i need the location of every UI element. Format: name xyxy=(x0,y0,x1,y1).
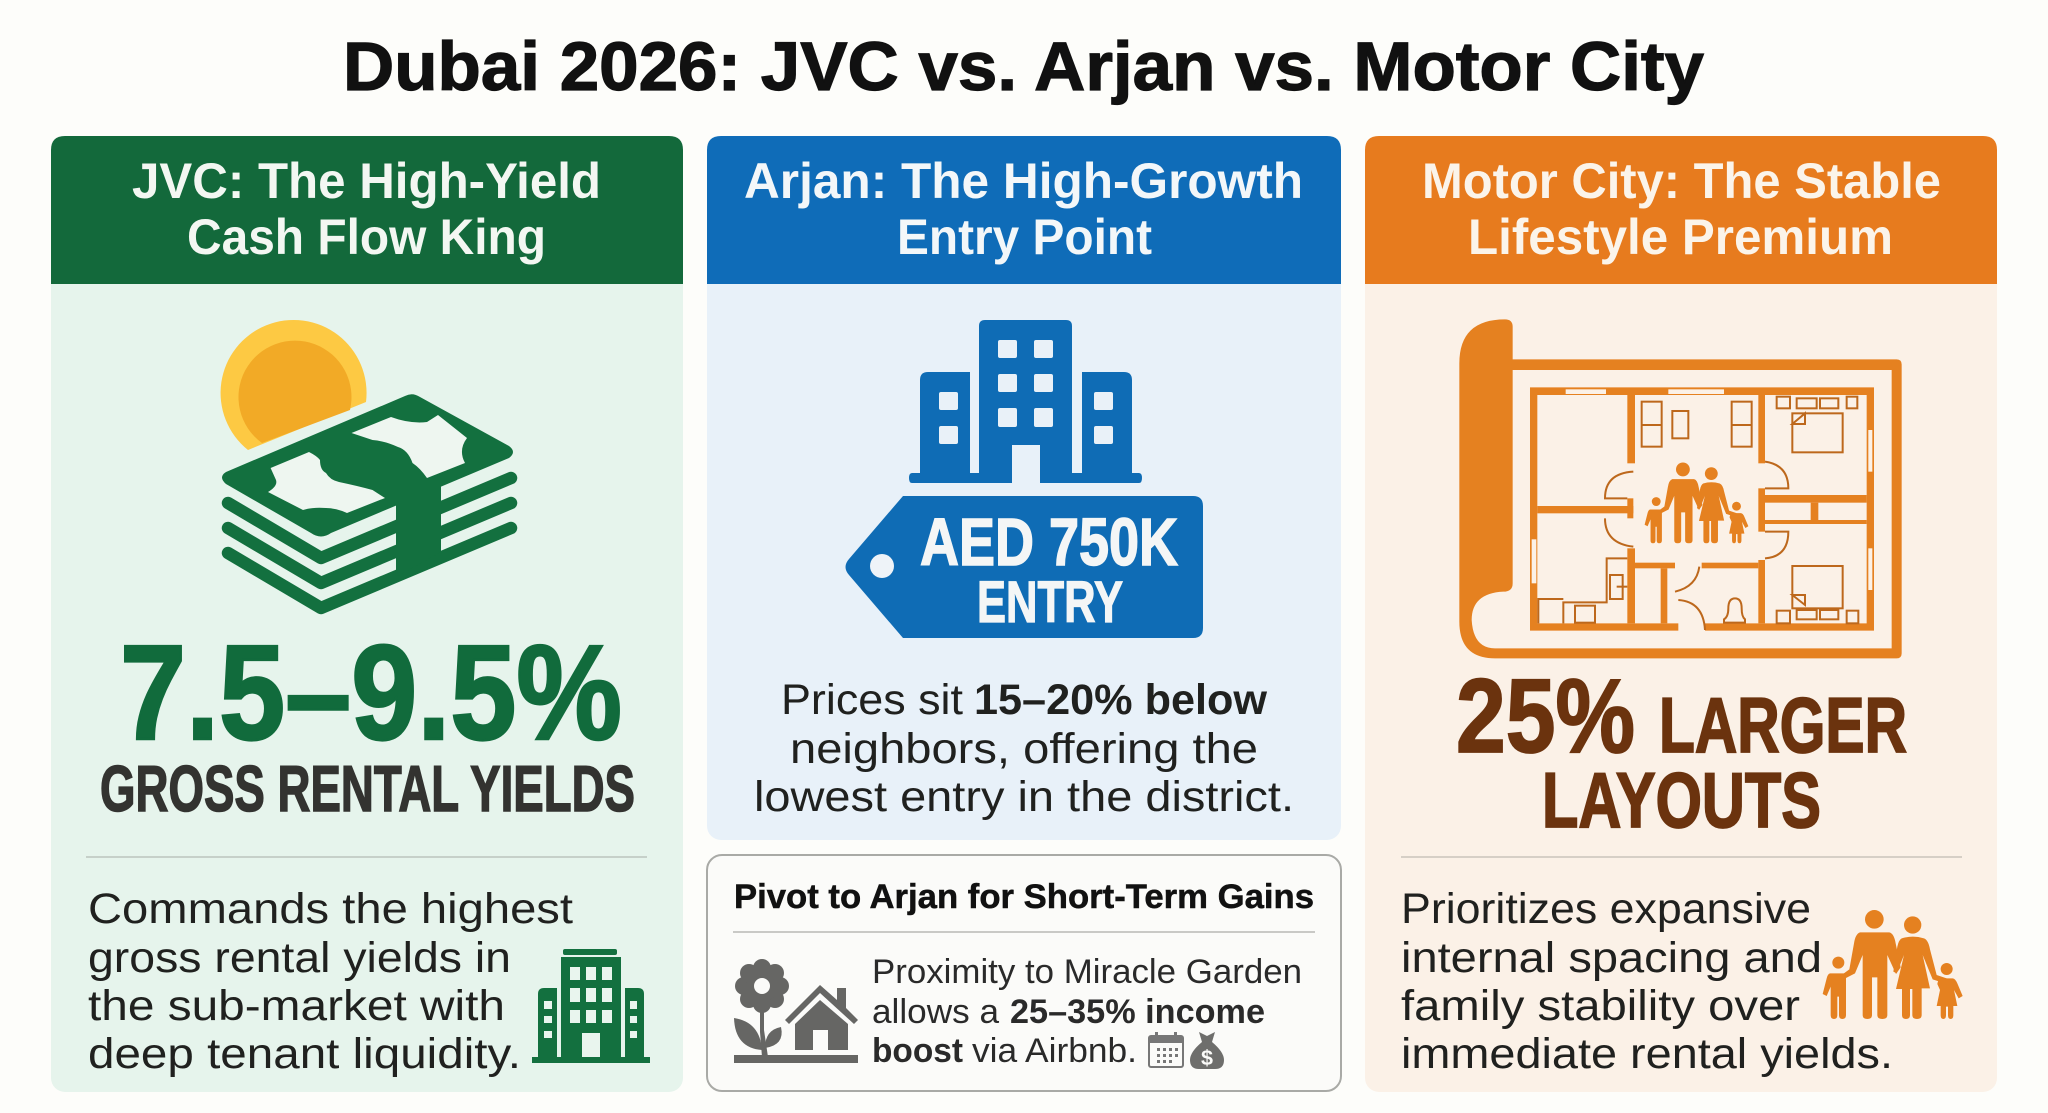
Arjan description: lowest entry in the district. xyxy=(754,773,1294,821)
icon: family xyxy=(1823,910,1963,1019)
Motor City description: Prioritizes expansive xyxy=(1401,885,1811,933)
Motor City description: internal spacing and xyxy=(1401,934,1822,982)
icon: calendar xyxy=(1149,1032,1183,1067)
big size figure: 25% xyxy=(1456,658,1635,775)
JVC heading: JVC: The High-Yield xyxy=(132,153,601,209)
icon: money bag: $ xyxy=(1201,1047,1213,1070)
panel: pivot callout xyxy=(707,855,1341,1091)
big yield figure: 7.5–9.5% xyxy=(120,617,622,768)
JVC description: gross rental yields in xyxy=(88,934,511,982)
icon: green office building xyxy=(532,949,650,1063)
JVC heading: Cash Flow King xyxy=(187,209,546,265)
Motor City description: family stability over xyxy=(1401,982,1800,1030)
icon: blue city buildings xyxy=(909,320,1142,483)
icon: money bag xyxy=(1190,1032,1224,1070)
icon: stack of banknotes xyxy=(222,394,513,608)
Arjan description: 15–20% below xyxy=(974,676,1268,724)
Arjan heading: Entry Point xyxy=(897,209,1152,265)
JVC description: Commands the highest xyxy=(88,885,573,933)
Arjan heading: Arjan: The High-Growth xyxy=(744,153,1303,209)
price tag caption: ENTRY xyxy=(977,570,1123,635)
big size figure: LARGER xyxy=(1659,681,1907,769)
callout description: boost xyxy=(872,1032,963,1070)
big size figure: LAYOUTS xyxy=(1542,756,1821,844)
Motor City heading xyxy=(1422,153,1941,265)
JVC header band xyxy=(51,136,683,284)
JVC heading xyxy=(132,153,601,265)
price tag xyxy=(846,496,1203,638)
panel: JVC xyxy=(51,136,683,1092)
panel: Arjan xyxy=(707,136,1341,840)
Motor City description xyxy=(1401,885,1893,1078)
yield label: GROSS RENTAL YIELDS xyxy=(100,752,635,825)
Arjan description xyxy=(754,676,1294,821)
JVC description: deep tenant liquidity. xyxy=(88,1030,521,1078)
JVC description xyxy=(88,885,573,1078)
Motor City description: immediate rental yields. xyxy=(1401,1030,1893,1078)
price tag amount: AED 750K xyxy=(920,505,1178,580)
icon: gold coin xyxy=(221,320,367,450)
panel: Motor City xyxy=(1365,136,1997,1092)
Motor City heading: Lifestyle Premium xyxy=(1468,209,1893,265)
JVC description: the sub-market with xyxy=(88,982,505,1030)
callout heading: Pivot to Arjan for Short-Term Gains xyxy=(734,878,1314,916)
Arjan description: neighbors, offering the xyxy=(790,725,1258,773)
title: Dubai 2026: JVC vs. Arjan vs. Motor City xyxy=(343,28,1704,105)
callout description: 25–35% income xyxy=(1010,993,1265,1031)
callout description: allows a xyxy=(872,993,999,1031)
icon: floor plan blueprint with family xyxy=(1459,319,1902,658)
Motor City header band xyxy=(1365,136,1997,284)
Arjan heading xyxy=(744,153,1303,265)
family in floor plan xyxy=(1645,463,1748,543)
Arjan description: Prices sit xyxy=(781,676,963,724)
callout description: Proximity to Miracle Garden xyxy=(872,953,1302,991)
big size figure xyxy=(1456,658,1907,844)
icon: flower and house xyxy=(734,959,858,1063)
callout description xyxy=(872,953,1302,1070)
Arjan header band xyxy=(707,136,1341,284)
callout description: via Airbnb. xyxy=(972,1032,1137,1070)
Motor City heading: Motor City: The Stable xyxy=(1422,153,1941,209)
